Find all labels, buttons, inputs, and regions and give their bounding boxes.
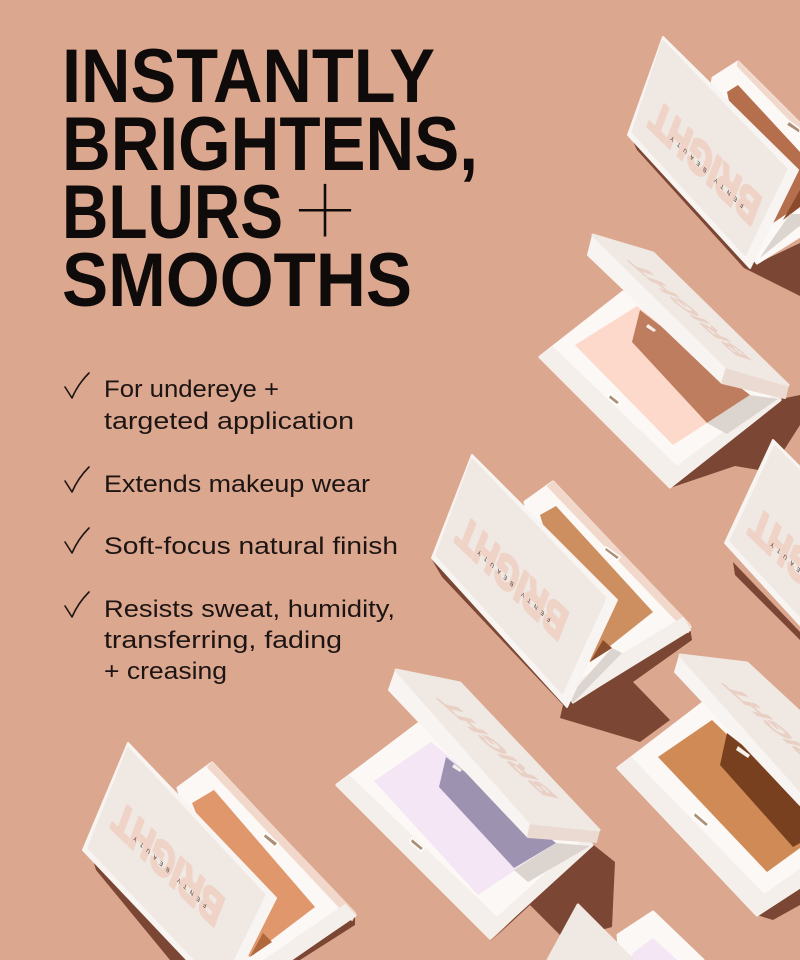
compact: top right, bronze, lid open: FENTY BEAUTY	[670, 134, 744, 208]
benefit: finish: Soft-focus natural finish	[104, 533, 398, 560]
compact: bronze-tan powder, lid open: FENTY BEAUTY	[477, 548, 551, 622]
compact: top right, bronze, lid open: BRIGHT	[644, 89, 767, 235]
benefit: resistance: Resists sweat, humidity,	[104, 596, 395, 623]
compact: bottom left, peach powder, lid open: FENTY BEAUTY	[133, 834, 207, 908]
compact: right, deep bronze powder, lid raised	[618, 655, 800, 920]
title: BRIGHTENS,	[62, 102, 478, 187]
benefit: undereye application: targeted application	[104, 408, 354, 435]
compact: pink powder, lid raised	[540, 235, 800, 488]
title: +	[290, 142, 360, 276]
icon: check	[65, 373, 89, 398]
title	[62, 34, 478, 323]
benefit: makeup wear	[65, 467, 370, 498]
benefit: undereye application	[65, 373, 354, 435]
title: SMOOTHS	[62, 238, 412, 323]
compact: bronze-tan powder, lid open: BRIGHT	[451, 504, 574, 650]
benefit: makeup wear: Extends makeup wear	[104, 471, 370, 498]
benefit: finish	[65, 528, 398, 560]
benefit: undereye application: For undereye +	[104, 376, 279, 403]
title: BLURS	[62, 170, 283, 255]
benefit: resistance: transferring, fading	[104, 627, 342, 654]
icon: check	[65, 592, 89, 617]
compact: lilac powder, lid raised	[337, 670, 615, 942]
compact: pink powder, lid raised: BRIGHT	[622, 259, 758, 363]
compact: top right, bronze, lid open	[628, 37, 800, 296]
icon: check	[65, 467, 89, 492]
benefit: resistance: + creasing	[104, 658, 227, 685]
compact: lilac powder, lid raised: BRIGHT	[432, 697, 565, 801]
benefit: resistance	[65, 592, 395, 685]
title: INSTANTLY	[62, 34, 435, 119]
compact: bottom left, peach powder, lid open	[83, 743, 355, 960]
compact: bottom left, peach powder, lid open: BRIGHT	[107, 790, 230, 936]
icon: check	[65, 528, 89, 553]
compact: bottom centre, cropped	[548, 905, 703, 960]
compact: bronze-tan powder, lid open	[432, 455, 692, 742]
